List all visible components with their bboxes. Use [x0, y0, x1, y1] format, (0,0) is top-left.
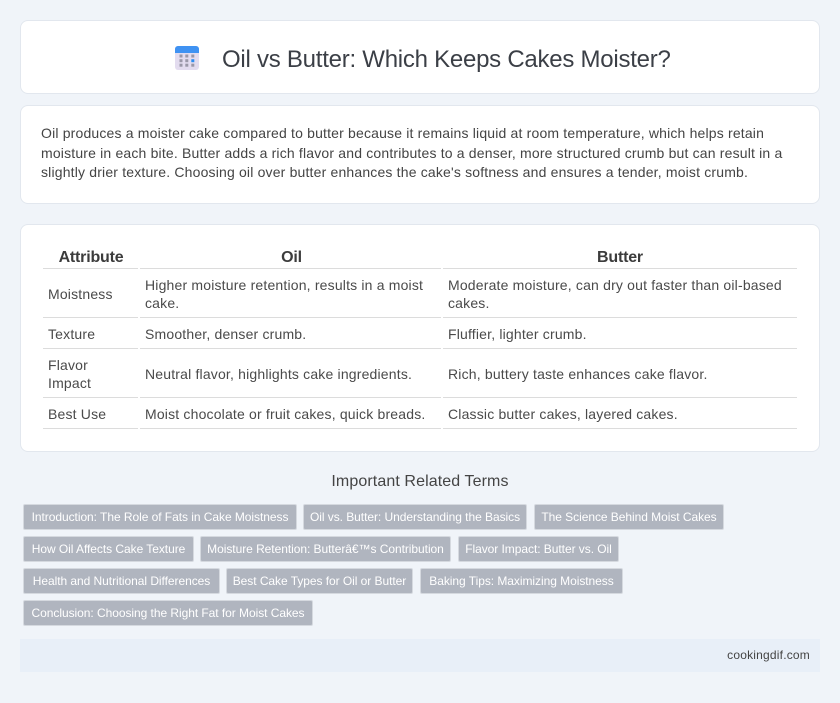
tag — [303, 504, 527, 530]
tag — [200, 536, 451, 562]
header card — [20, 20, 820, 94]
header: Attribute: Attribute — [59, 249, 123, 266]
tag — [23, 536, 194, 562]
row: Flavor Impact: Flavor — [48, 357, 88, 373]
oil moistness: cake. — [145, 295, 179, 311]
intro text — [41, 125, 782, 180]
row: Best Use: Best Use — [48, 406, 106, 422]
tag: Baking Tips: Maximizing Moistness — [429, 574, 614, 588]
tag — [226, 568, 413, 594]
footer credit: cookingdif.com — [727, 648, 810, 662]
tag — [534, 504, 724, 530]
tag — [23, 568, 220, 594]
comparison table card — [20, 224, 820, 452]
butter flavor: Rich, buttery taste enhances cake flavor. — [448, 366, 708, 382]
oil best use: Moist chocolate or fruit cakes, quick breads. — [145, 406, 425, 422]
butter moistness: Moderate moisture, can dry out faster than oil-based — [448, 277, 782, 293]
oil moistness — [145, 277, 423, 311]
oil moistness: Higher moisture retention, results in a moist — [145, 277, 423, 293]
butter moistness: cakes. — [448, 295, 490, 311]
row: Texture: Texture — [48, 326, 95, 342]
oil flavor: Neutral flavor, highlights cake ingredients. — [145, 366, 412, 382]
header: Butter: Butter — [597, 249, 643, 266]
row: Flavor Impact — [48, 357, 91, 391]
icon: calendar — [175, 46, 199, 70]
tag — [23, 504, 297, 530]
intro text: moisture in each bite. Butter adds a rich flavor and contributes to a denser, more structured crumb but can result in a — [41, 145, 782, 161]
intro text: Oil produces a moister cake compared to butter because it remains liquid at room temperature, which helps retain — [41, 125, 764, 141]
tag: Best Cake Types for Oil or Butter — [233, 574, 406, 588]
tag: The Science Behind Moist Cakes — [541, 510, 717, 524]
title: Oil vs Butter: Which Keeps Cakes Moister? — [222, 46, 671, 73]
header: Oil: Oil — [281, 249, 302, 266]
tag: Conclusion: Choosing the Right Fat for Moist Cakes — [32, 606, 304, 620]
related terms heading: Important Related Terms — [331, 473, 509, 490]
oil texture: Smoother, denser crumb. — [145, 326, 306, 342]
table — [43, 249, 797, 429]
related terms tags — [23, 504, 724, 626]
tag: Moisture Retention: Butterâ€™s Contribution — [207, 542, 444, 556]
row: Flavor Impact: Impact — [48, 375, 91, 391]
row: Moistness: Moistness — [48, 286, 113, 302]
butter best use: Classic butter cakes, layered cakes. — [448, 406, 678, 422]
tag: How Oil Affects Cake Texture — [32, 542, 185, 556]
butter moistness — [448, 277, 782, 311]
tag: Oil vs. Butter: Understanding the Basics — [310, 510, 520, 524]
tag: Introduction: The Role of Fats in Cake Moistness — [32, 510, 288, 524]
intro paragraph card — [20, 105, 820, 204]
butter texture: Fluffier, lighter crumb. — [448, 326, 587, 342]
footer — [20, 639, 820, 672]
tag: Health and Nutritional Differences — [33, 574, 210, 588]
tag: Flavor Impact: Butter vs. Oil — [465, 542, 612, 556]
tag — [420, 568, 623, 594]
tag — [458, 536, 619, 562]
intro text: slightly drier texture. Choosing oil over butter enhances the cake's softness and ensures a tender, moist crumb. — [41, 164, 748, 180]
tag — [23, 600, 313, 626]
